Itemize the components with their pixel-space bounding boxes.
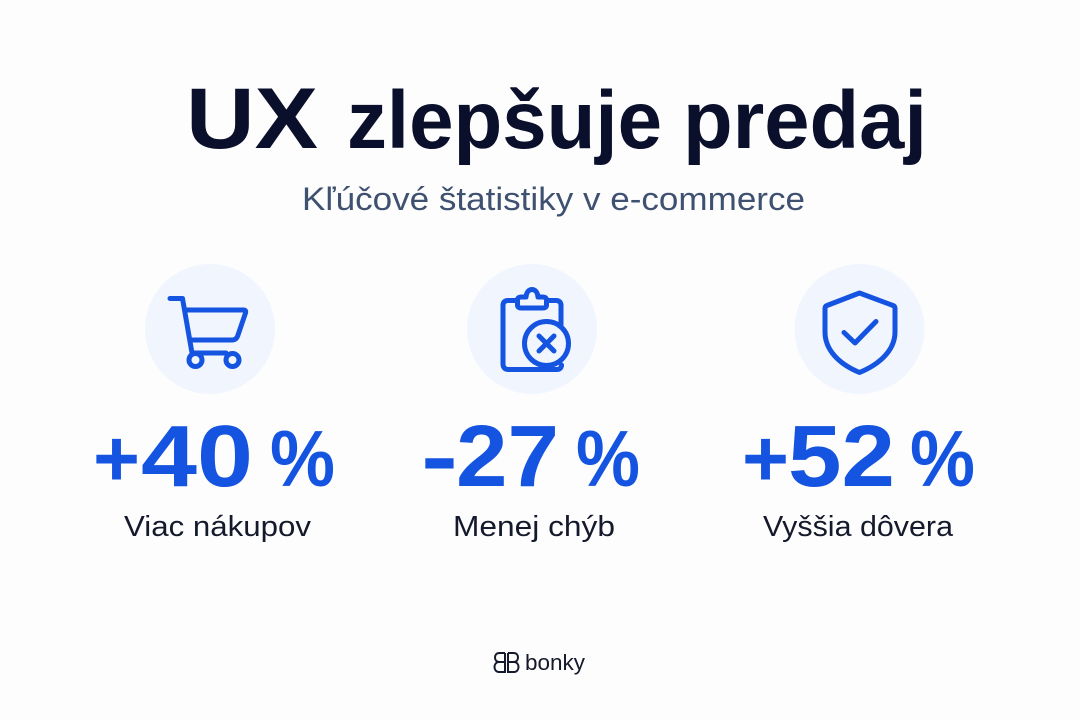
stat: +52 %: % (910, 414, 975, 503)
title: zlepšuje (347, 75, 662, 166)
stat: -27 %: - (421, 409, 458, 505)
panel: viac nakupov (93, 264, 335, 543)
stat: +40 %: % (270, 414, 335, 503)
panel: vyssia dovera (742, 264, 975, 543)
icon: bonky mark (494, 653, 518, 672)
panel: menej chyb (421, 264, 640, 543)
stat: +40 %: 40 (141, 408, 253, 505)
stat: +52 % (742, 408, 975, 505)
icon: shield with check (794, 264, 924, 394)
stat: -27 %: 27 (456, 408, 559, 505)
title (186, 71, 927, 167)
stat: +40 % (93, 408, 335, 505)
stat: +40 %: + (93, 414, 140, 503)
label: Menej chýb: Menej chýb (453, 511, 615, 543)
label: Viac nákupov: Viac nákupov (124, 511, 312, 543)
stat: +52 %: 52 (788, 408, 895, 505)
title: UX (186, 71, 318, 167)
subtitle: Kľúčové štatistiky v e-commerce (302, 181, 805, 217)
label: Vyššia dôvera: Vyššia dôvera (763, 511, 954, 543)
stat: -27 %: % (576, 414, 640, 503)
logo: bonky (494, 650, 585, 675)
stat: +52 %: + (742, 414, 789, 503)
icon: shopping cart (145, 264, 275, 394)
title: predaj (683, 75, 927, 166)
wordmark: bonky (525, 650, 585, 675)
stat: -27 % (421, 408, 640, 505)
icon: clipboard with x (467, 264, 597, 394)
